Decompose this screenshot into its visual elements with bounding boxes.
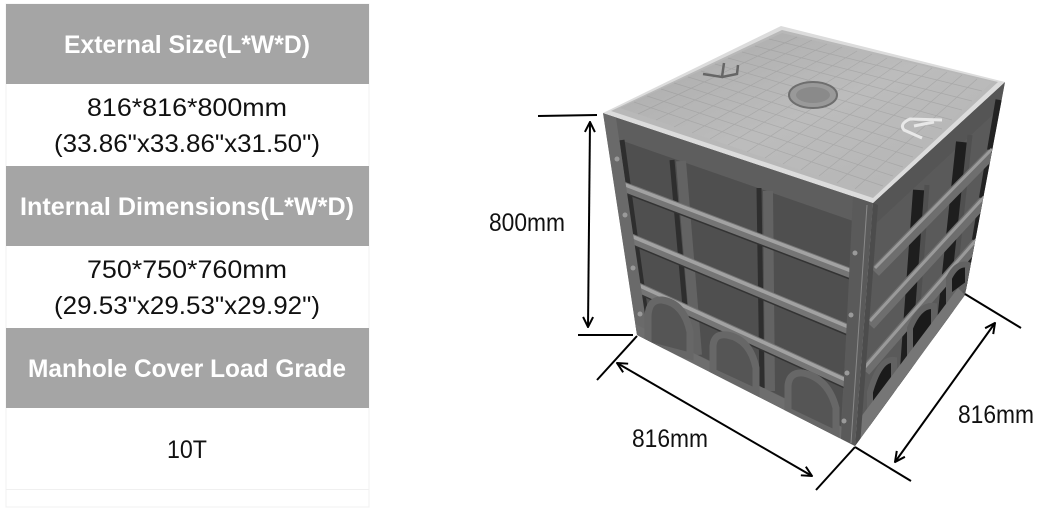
- arches: [648, 300, 690, 356]
- text: load grade value: 10T: [167, 436, 207, 464]
- base band: [860, 288, 965, 438]
- inset panel area: [620, 140, 853, 426]
- bottom band: [635, 324, 856, 446]
- shadows beside ribs: [622, 140, 762, 388]
- text: internal dimension values: 750*750*760mm: [87, 256, 287, 284]
- icon: centre access plug: [789, 82, 837, 108]
- heading: internal dimensions: [6, 166, 369, 246]
- top frame band: [871, 82, 1005, 228]
- illustration: manhole chamber box: [603, 26, 1005, 446]
- heading: manhole cover load grade: [6, 328, 369, 408]
- horizontal ribs: [865, 153, 992, 371]
- label: 800mm: 800mm: [489, 209, 565, 237]
- text: internal dimension values: (29.53"x29.53"x29.92"): [54, 292, 320, 320]
- front post: [841, 196, 873, 446]
- post edge: [855, 203, 878, 446]
- text: external size values: 816*816*800mm: [87, 94, 287, 122]
- text: internal dimension values: [54, 256, 320, 320]
- text: external size values: [54, 94, 320, 158]
- horizontal ribs: [623, 187, 854, 384]
- label: 816mm front: 816mm: [632, 425, 708, 453]
- dimension: side width arrow: [855, 294, 1021, 481]
- arches: [870, 360, 894, 432]
- vertical ribs: [681, 161, 770, 391]
- text: external size values: (33.86"x33.86"x31.50"): [54, 130, 320, 158]
- bolts: [614, 156, 858, 424]
- dimension: height arrow: [538, 115, 633, 335]
- icon: left lifting handle: [703, 63, 738, 77]
- left post: [603, 113, 649, 342]
- box right face: [851, 82, 1005, 446]
- heading: manhole cover load grade: Manhole Cover Load Grade: [28, 355, 346, 383]
- label: 816mm side: 816mm: [958, 401, 1034, 429]
- icon: right lifting handle: [902, 119, 942, 138]
- heading: external size: [6, 4, 369, 84]
- box left face: [603, 113, 873, 446]
- heading: internal dimensions: Internal Dimensions(L*W*D): [20, 193, 354, 221]
- panel: specification table: [6, 4, 369, 507]
- box top cover: [603, 26, 1005, 203]
- dimension: front width arrow: [597, 336, 855, 490]
- heading: external size: External Size(L*W*D): [64, 31, 310, 59]
- cover grid: [634, 37, 982, 189]
- dark vertical channels: [903, 142, 962, 410]
